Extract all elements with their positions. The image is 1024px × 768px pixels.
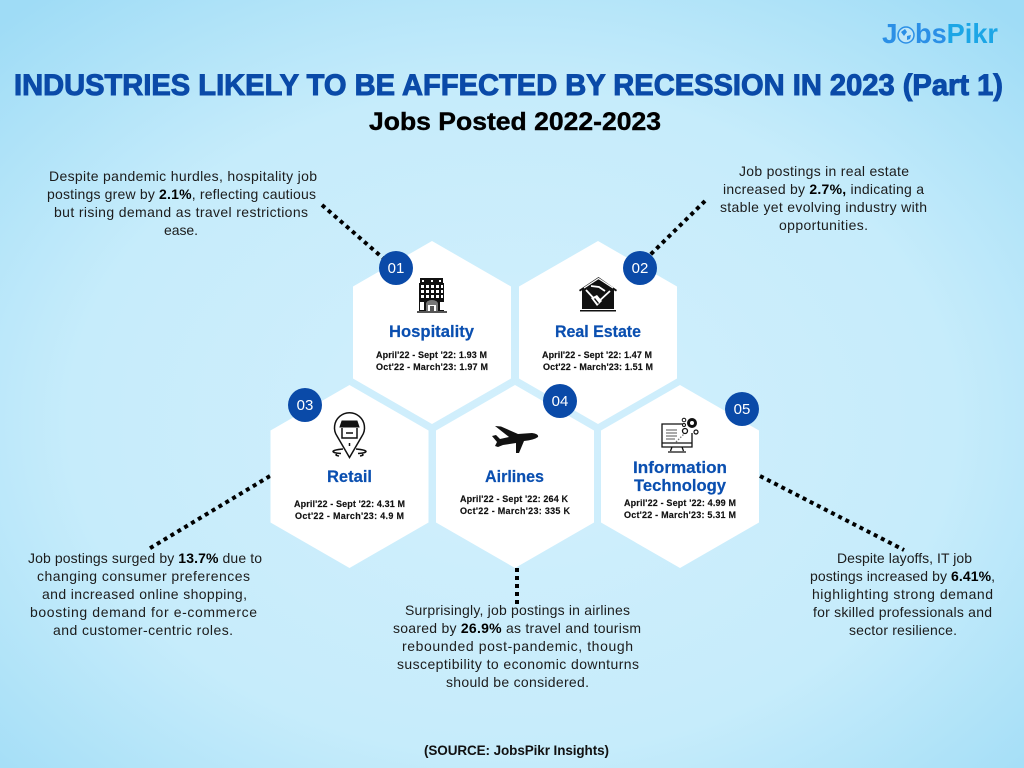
stats: airlines: Oct'22 - March'23: 335 K: [460, 506, 570, 516]
panel: retail: [270, 385, 428, 568]
stats: real estate: [542, 350, 653, 372]
title: INDUSTRIES LIKELY TO BE AFFECTED BY RECESSION IN 2023 (Part 1): [14, 69, 1003, 102]
badge: 03: 03: [297, 397, 313, 414]
stats: information technology: Oct'22 - March'23: 5.31 M: [624, 510, 736, 520]
logo: JobsPikr: J: [882, 18, 898, 49]
stats: retail: Oct'22 - March'23: 4.9 M: [295, 511, 404, 521]
text block: information technology: [810, 550, 995, 638]
badge: 03: [288, 388, 322, 422]
panel: hospitality: [353, 241, 511, 424]
text block: real estate: stable yet evolving industry with: [720, 199, 927, 215]
badge: 02: 02: [632, 260, 648, 277]
icon: house handshake: [579, 277, 617, 312]
heading: information technology: Technology: [634, 477, 727, 495]
panel: airlines: [436, 384, 594, 568]
text block: airlines: should be considered.: [446, 674, 589, 690]
heading: information technology: [633, 459, 727, 495]
text block: retail: and increased online shopping,: [42, 586, 247, 602]
text block: real estate: Job postings in real estate: [739, 163, 909, 179]
logo: JobsPikr: bsPikr: [915, 18, 998, 49]
heading: airlines: Airlines: [485, 468, 544, 486]
text block: information technology: Despite layoffs, IT job: [837, 550, 972, 566]
panel: information technology: [601, 385, 759, 568]
heading: retail: Retail: [327, 468, 372, 486]
connector: information technology: [760, 476, 904, 550]
heading: real estate: Real Estate: [555, 323, 641, 341]
text block: retail: and customer-centric roles.: [53, 622, 233, 638]
connector: retail: [147, 476, 270, 550]
text block: real estate: increased by 2.7%, indicating a: [723, 181, 924, 197]
badge: 01: 01: [388, 260, 404, 277]
stats: real estate: Oct'22 - March'23: 1.51 M: [543, 362, 653, 372]
text block: airlines: susceptibility to economic downturns: [397, 656, 639, 672]
stats: retail: [294, 499, 405, 521]
badge: 05: 05: [734, 401, 750, 418]
text block: real estate: opportunities.: [779, 217, 868, 233]
stats: airlines: April'22 - Sept '22: 264 K: [460, 494, 568, 504]
source note: (SOURCE: JobsPikr Insights): [424, 743, 609, 758]
text block: hospitality: but rising demand as travel restrictions: [54, 204, 308, 220]
stats: information technology: [624, 498, 736, 520]
badge: 04: [543, 384, 577, 418]
panel: real estate: [519, 241, 677, 424]
badge: 01: [379, 251, 413, 285]
stats: information technology: April'22 - Sept '22: 4.99 M: [624, 498, 736, 508]
text block: airlines: [393, 602, 641, 690]
text block: retail: [28, 550, 262, 638]
badge: 04: 04: [552, 393, 568, 410]
heading: information technology: Information: [633, 459, 727, 477]
stats: real estate: April'22 - Sept '22: 1.47 M: [542, 350, 652, 360]
icon: airplane: [492, 426, 538, 453]
stats: retail: April'22 - Sept '22: 4.31 M: [294, 499, 405, 509]
stats: airlines: [460, 494, 570, 516]
text block: real estate: [720, 163, 927, 233]
badge: 02: [623, 251, 657, 285]
text block: airlines: Surprisingly, job postings in airlines: [405, 602, 630, 618]
icon: store pin: [333, 413, 366, 458]
connector: real estate: [650, 201, 705, 255]
text block: retail: changing consumer preferences: [37, 568, 250, 584]
text block: information technology: for skilled professionals and: [813, 604, 992, 620]
connector: hospitality: [322, 205, 384, 259]
text block: hospitality: Despite pandemic hurdles, hospitality job: [49, 168, 317, 184]
text block: retail: boosting demand for e-commerce: [30, 604, 257, 620]
connector: airlines: [515, 568, 519, 604]
icon: hotel building: [417, 278, 447, 313]
subtitle: Jobs Posted 2022-2023: [369, 108, 661, 136]
icon: computer with gears: [662, 418, 698, 452]
heading: hospitality: Hospitality: [389, 323, 475, 341]
text block: information technology: postings increased by 6.41%,: [810, 568, 995, 584]
stats: hospitality: April'22 - Sept '22: 1.93 M: [376, 350, 487, 360]
text block: airlines: soared by 26.9% as travel and tourism: [393, 620, 641, 636]
text block: hospitality: [47, 168, 317, 238]
text block: hospitality: ease.: [164, 222, 198, 238]
text block: information technology: sector resilience.: [849, 622, 957, 638]
badge: 05: [725, 392, 759, 426]
stats: hospitality: Oct'22 - March'23: 1.97 M: [376, 362, 488, 372]
text block: airlines: rebounded post-pandemic, though: [402, 638, 633, 654]
text block: information technology: highlighting strong demand: [812, 586, 993, 602]
text block: hospitality: postings grew by 2.1%, reflecting cautious: [47, 186, 316, 202]
stats: hospitality: [376, 350, 488, 372]
text block: retail: Job postings surged by 13.7% due to: [28, 550, 262, 566]
